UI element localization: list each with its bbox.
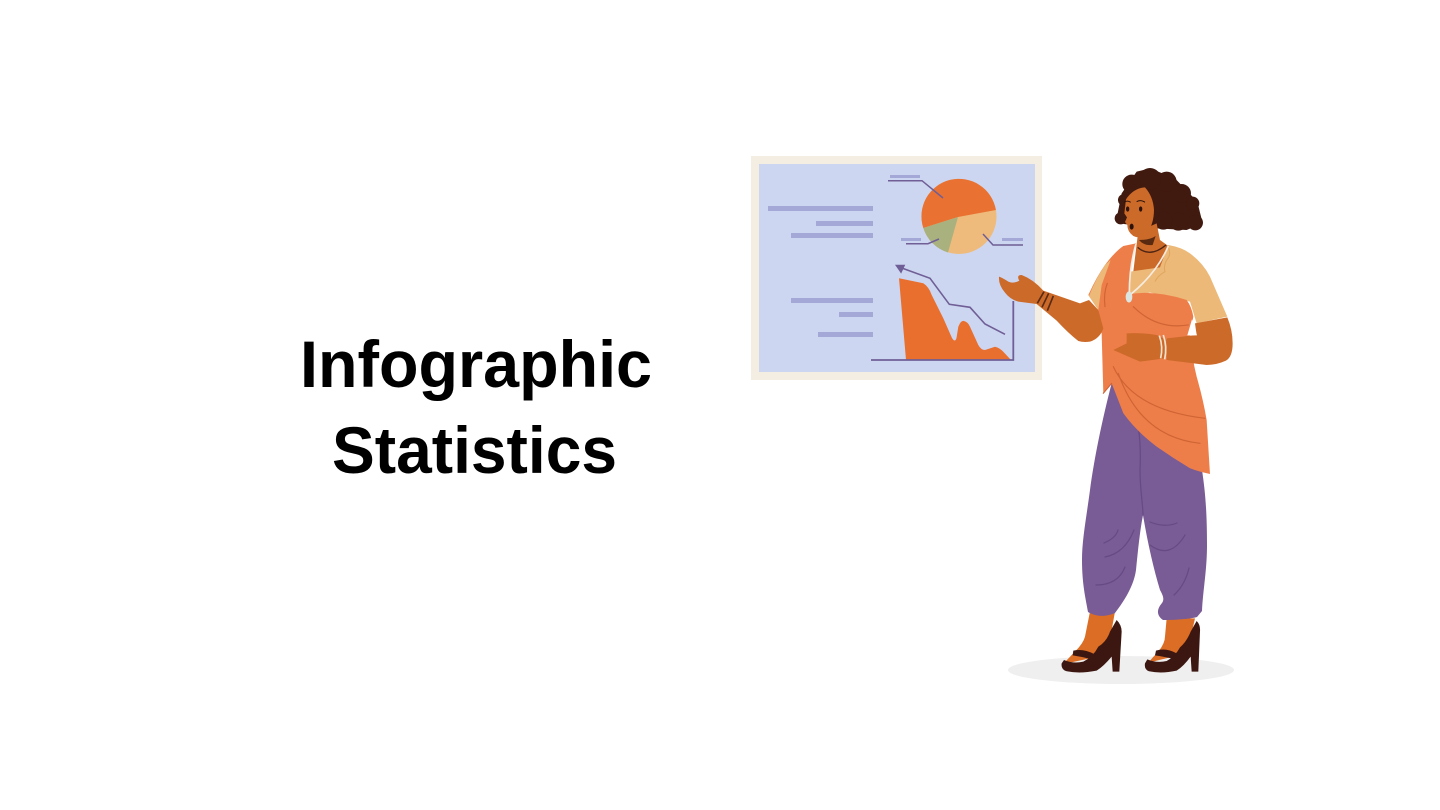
feet and shoes [1062, 612, 1200, 672]
chart axes [871, 301, 1013, 360]
pie chart callouts [888, 175, 1023, 245]
presenter figure [999, 168, 1234, 684]
left sleeve [1089, 260, 1111, 310]
trend line arrow [896, 266, 1005, 334]
eyes, brows and mouth [1124, 201, 1145, 230]
title: Statistics [332, 413, 617, 487]
sari folds [1103, 283, 1205, 443]
blouse [1130, 245, 1227, 323]
neck [1133, 223, 1168, 272]
resting hand [1113, 333, 1167, 362]
text placeholder bars, lower [791, 298, 873, 337]
torso and arms [999, 168, 1233, 474]
blouse ruffle [1155, 247, 1170, 282]
hair [1115, 168, 1203, 231]
text placeholder bars, upper [768, 206, 873, 238]
title [300, 327, 652, 487]
title: Infographic [300, 327, 652, 401]
sari drape [1088, 243, 1210, 474]
pie chart [921, 179, 996, 254]
presentation board [751, 156, 1042, 380]
area chart [899, 278, 1011, 360]
face [1124, 187, 1154, 237]
bracelet [1037, 292, 1053, 311]
right arm [1167, 317, 1233, 365]
trouser folds [1096, 382, 1189, 595]
necklace [1126, 244, 1168, 303]
floor shadow [1008, 656, 1234, 684]
bangles [1159, 335, 1166, 359]
pointing arm [999, 275, 1103, 342]
trousers [1082, 382, 1207, 620]
